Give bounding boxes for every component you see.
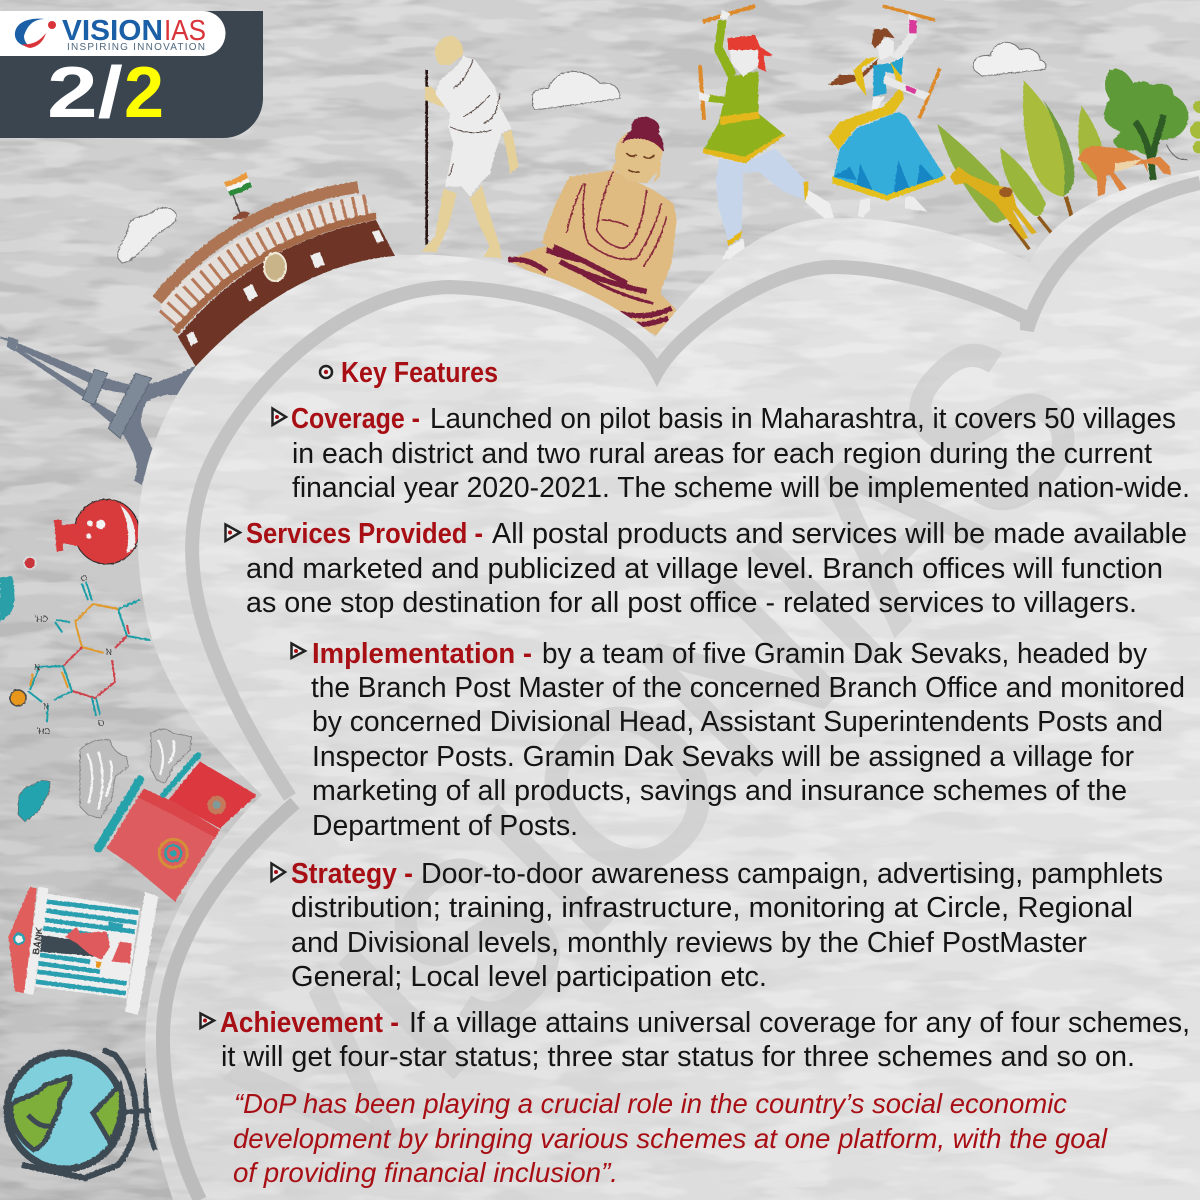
icon: orange ring — [10, 690, 26, 706]
diagram: molecule: CH, — [34, 614, 48, 623]
text block: coverage — [272, 403, 1190, 504]
icon: red flags — [98, 755, 257, 902]
icon: left cloud — [118, 208, 176, 263]
icon: Buddha — [507, 117, 677, 337]
text block: achievement: it will get four-star status; three star status for three schemes and so on. — [221, 1041, 1135, 1073]
icon: parliament building — [157, 187, 395, 367]
text block: implementation — [292, 638, 1185, 842]
page number: 2 — [124, 53, 164, 133]
text block: coverage: Coverage - — [291, 403, 420, 435]
text block: implementation: Inspector Posts. Gramin Dak Sevaks will be assigned a village for — [312, 741, 1134, 773]
page number: 2/ — [47, 53, 123, 133]
diagram: molecule — [28, 574, 150, 735]
icon: teal cloud — [18, 781, 50, 822]
diagram: molecule: N — [106, 648, 112, 657]
icon: bank: BANK — [31, 927, 44, 955]
text block: strategy: General; Local level participation etc. — [291, 961, 767, 993]
text block: services provided: and marketed and publicized at village level. Branch offices will function — [246, 553, 1163, 585]
text block: implementation: Department of Posts. — [312, 810, 578, 842]
icon: trees — [937, 69, 1200, 249]
icon: right cloud — [973, 42, 1046, 76]
icon: smoke puffs — [80, 729, 192, 818]
icon: red ball — [24, 557, 36, 569]
icon: Indian flag — [224, 172, 252, 196]
diagram: molecule: CH, — [36, 726, 50, 735]
icon: bank — [8, 887, 158, 1015]
text block: services provided: as one stop destination for all post office - related services to villagers. — [246, 587, 1137, 619]
diagram: molecule: O — [98, 719, 104, 728]
text block: services provided: All postal products and services will be made available — [492, 518, 1187, 550]
icon: teal blob — [0, 576, 14, 622]
text block: services provided — [226, 518, 1187, 619]
diagram: molecule: N — [34, 663, 40, 672]
panel: content cloud — [138, 170, 1200, 1200]
logo pill — [0, 11, 226, 56]
icon: male dancer — [698, 6, 835, 259]
logo pill: INSPIRING INNOVATION — [67, 42, 205, 53]
header panel — [0, 11, 263, 138]
icon: female dancer — [828, 6, 946, 217]
heading: key features: Key Features — [341, 357, 498, 389]
text block: implementation: Implementation - — [312, 638, 532, 670]
text block: achievement: If a village attains universal coverage for any of four schemes, — [409, 1007, 1190, 1039]
text block: coverage: in each district and two rural areas for each region during the current — [292, 438, 1152, 470]
logo pill: IAS — [164, 15, 206, 47]
text block: implementation: the Branch Post Master of the concerned Branch Office and monitored — [311, 672, 1185, 704]
text block: implementation: by a team of five Gramin Dak Sevaks, headed by — [542, 638, 1147, 670]
logo pill: VISION — [62, 15, 163, 47]
text block: services provided: Services Provided - — [246, 518, 483, 550]
text block: coverage: financial year 2020-2021. The scheme will be implemented nation-wide. — [292, 472, 1190, 504]
text block: implementation: by concerned Divisional Head, Assistant Superintendents Posts and — [312, 706, 1163, 738]
text block: strategy: and Divisional levels, monthly reviews by the Chief PostMaster — [291, 927, 1087, 959]
text block: achievement: Achievement - — [220, 1007, 399, 1039]
icon: Eiffel tower — [0, 337, 201, 485]
quote: of providing financial inclusion”. — [233, 1157, 618, 1188]
icon: globe — [7, 1050, 160, 1178]
text block: strategy — [272, 858, 1163, 993]
quote: development by bringing various schemes at one platform, with the goal — [233, 1123, 1108, 1154]
text block: strategy: Door-to-door awareness campaign, advertising, pamphlets — [421, 858, 1163, 890]
icon: centre cloud — [532, 72, 620, 110]
diagram: molecule: N — [43, 702, 49, 711]
icon: flask — [54, 499, 139, 564]
page number — [47, 53, 164, 133]
quote: “DoP has been playing a crucial role in the country’s social economic — [234, 1088, 1067, 1119]
icon: Gandhi — [422, 36, 518, 258]
icon: giraffe — [950, 167, 1037, 239]
text block: implementation: marketing of all products, savings and insurance schemes of the — [312, 775, 1127, 807]
diagram: molecule: O — [81, 574, 87, 583]
watermark: VISIONIAS — [190, 285, 1133, 1200]
text block: coverage: Launched on pilot basis in Maharashtra, it covers 50 villages — [430, 403, 1176, 435]
text block: strategy: Strategy - — [291, 858, 413, 890]
icon: tiger — [1078, 145, 1187, 197]
quote — [233, 1088, 1108, 1188]
text block: achievement — [200, 1007, 1190, 1073]
text block: strategy: distribution; training, infrastructure, monitoring at Circle, Regional — [291, 892, 1133, 924]
